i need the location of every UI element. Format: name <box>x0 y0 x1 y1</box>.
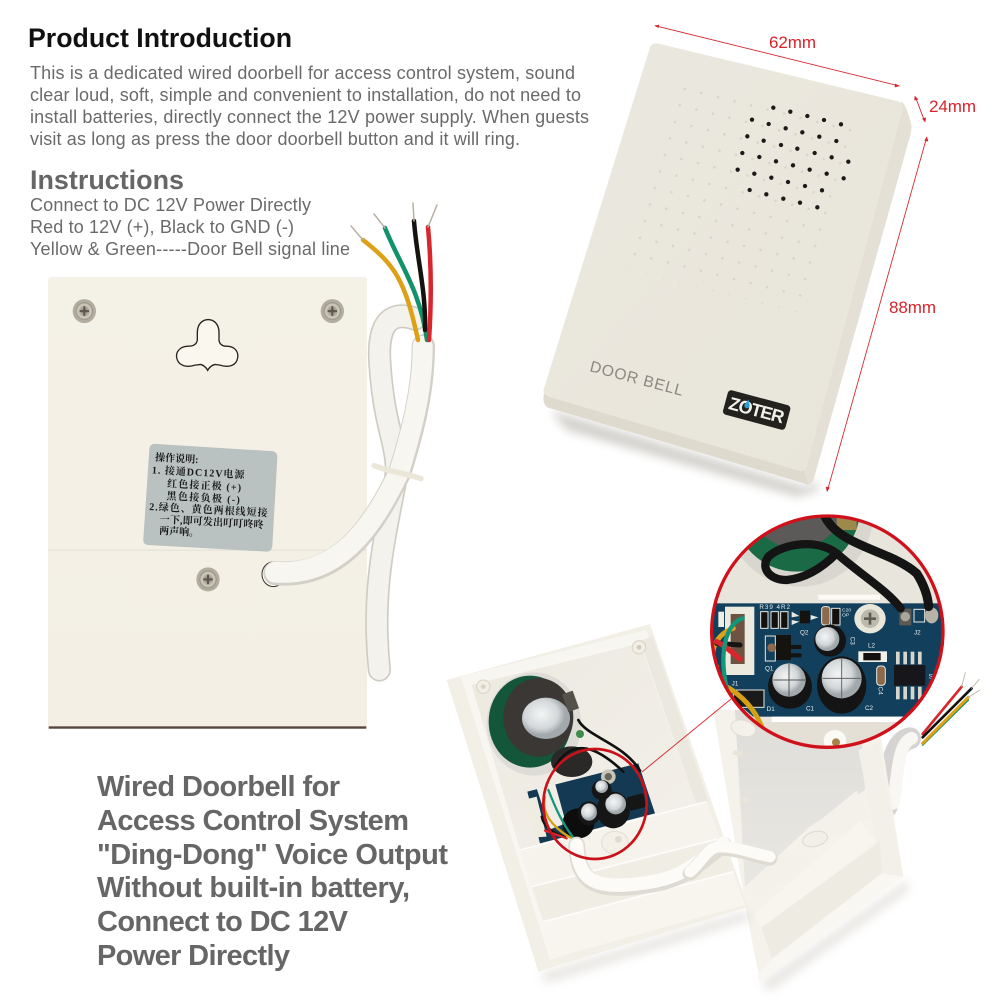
title: Product Introduction: Product Introduction <box>28 23 292 53</box>
instruction sticker: 1. 接通DC12V电源 <box>152 463 246 481</box>
magnified wires <box>713 517 929 727</box>
text block: wiring instructions: Connect to DC 12V Power Directly <box>30 195 311 215</box>
heading: Instructions: Instructions <box>30 165 184 195</box>
silkscreen labels <box>732 604 933 713</box>
silkscreen labels: J2 <box>914 629 921 636</box>
printed label: DOOR BELL: DOOR BELL <box>588 358 685 400</box>
silkscreen labels: C3 <box>849 637 856 645</box>
silkscreen labels: D1 <box>767 706 775 713</box>
silkscreen labels: C1 <box>806 706 815 713</box>
keyhole slot <box>177 320 238 370</box>
instruction sticker: 红色接正极 (+) <box>167 477 241 494</box>
base shell inner tray <box>461 630 735 960</box>
instruction sticker <box>143 444 277 552</box>
compartment ribs <box>520 802 745 958</box>
dimension arrow: 62mm <box>654 25 900 87</box>
brand badge: ZOTER: ZOTER <box>727 393 787 427</box>
rear cable <box>887 738 912 807</box>
instruction sticker: 操作说明: <box>155 451 199 466</box>
instruction sticker: 黑色接负极 (-) <box>166 489 240 506</box>
silkscreen labels: C2 <box>865 705 874 712</box>
silkscreen labels: C20 <box>842 608 851 614</box>
back panel <box>48 277 367 728</box>
photo: open base with speaker and board <box>447 624 750 983</box>
cable loop <box>262 316 423 670</box>
silkscreen labels: Q1 <box>765 666 774 673</box>
lid ribs <box>733 750 882 958</box>
silkscreen labels: L2 <box>868 643 876 650</box>
text block: product summary <box>97 771 448 972</box>
text block: wiring instructions <box>30 195 350 259</box>
instruction sticker: 一下,即可发出叮叮咚咚 <box>159 513 264 531</box>
text block: product description: visit as long as press the door doorbell button and it will ring. <box>30 129 520 149</box>
silkscreen labels: Q2 <box>800 629 809 636</box>
exposed colored wires <box>351 203 437 340</box>
speaker holes <box>735 105 850 209</box>
label: 88mm: 88mm <box>889 298 936 317</box>
instruction sticker: 两声响。 <box>159 524 199 539</box>
speaker <box>487 672 592 777</box>
magnified speaker <box>742 522 872 586</box>
silkscreen labels: OP <box>842 613 850 619</box>
label: 24mm: 24mm <box>929 97 976 116</box>
device bottom side <box>543 393 808 485</box>
cable tie <box>374 466 421 479</box>
IC chip <box>894 665 925 686</box>
colored board wires <box>542 790 577 842</box>
lid bottom wall <box>757 873 903 982</box>
callout: small red circle <box>543 749 647 859</box>
callout: connector line <box>642 699 731 772</box>
photo: open lid with rear cable <box>713 710 912 992</box>
electrolytic capacitors <box>768 625 866 714</box>
text block: product summary: "Ding-Dong" Voice Output <box>97 839 448 871</box>
capacitor C4 <box>877 666 885 685</box>
text block: product summary: Power Directly <box>97 940 290 972</box>
transistors <box>775 611 810 660</box>
silkscreen labels: S <box>929 673 933 680</box>
text block: product summary: Connect to DC 12V <box>97 906 349 938</box>
text block: product summary: Access Control System <box>97 805 409 837</box>
inductor L2 <box>858 651 887 662</box>
text block: product description: install batteries, directly connect the 12V power supply. When guests <box>30 107 589 127</box>
device front face <box>544 43 903 471</box>
lid post below board <box>824 730 846 746</box>
label: 62mm: 62mm <box>769 33 816 52</box>
photo: doorbell back with cable <box>48 277 423 729</box>
circuit board <box>523 763 655 843</box>
silkscreen labels: J1 <box>732 680 739 687</box>
silkscreen labels: C4 <box>876 687 883 695</box>
mounting posts <box>477 641 646 854</box>
photo: doorbell front with dimensions <box>543 25 928 497</box>
top compartment floor <box>472 643 697 850</box>
instruction sticker: 2.绿色、黄色两根线短接 <box>149 500 269 520</box>
lid inner floor <box>735 710 865 887</box>
dimension arrow: 88mm <box>826 136 928 492</box>
mounting screws <box>73 299 344 591</box>
text block: product description <box>30 63 589 149</box>
solder pads <box>899 609 911 625</box>
speaker wires <box>555 720 640 772</box>
callout: magnified circuit board <box>710 514 945 749</box>
photo: rear cable wires <box>923 673 980 745</box>
screw <box>854 604 886 633</box>
sound vent dot grid <box>617 78 863 315</box>
silkscreen labels: R39 4R2 <box>759 604 790 611</box>
text block: wiring instructions: Red to 12V (+), Black to GND (-) <box>30 217 294 237</box>
text block: product summary: Without built-in battery, <box>97 872 410 904</box>
dimension arrow: 24mm <box>914 96 926 122</box>
lid body <box>713 710 903 982</box>
board background <box>710 603 943 717</box>
connector block <box>725 607 754 675</box>
base shell outer <box>447 624 748 972</box>
internal white cable <box>577 843 723 887</box>
text block: wiring instructions: Yellow & Green-----Door Bell signal line <box>30 239 350 259</box>
internal cable continuing to lid <box>690 847 770 873</box>
text block: product summary: Wired Doorbell for <box>97 771 340 803</box>
text block: product description: clear loud, soft, simple and convenient to installation, do not need to <box>30 85 581 105</box>
text block: product description: This is a dedicated wired doorbell for access control system, sound <box>30 63 575 83</box>
lid right wall <box>858 743 903 877</box>
device right side <box>797 102 912 485</box>
resistors <box>761 608 840 628</box>
